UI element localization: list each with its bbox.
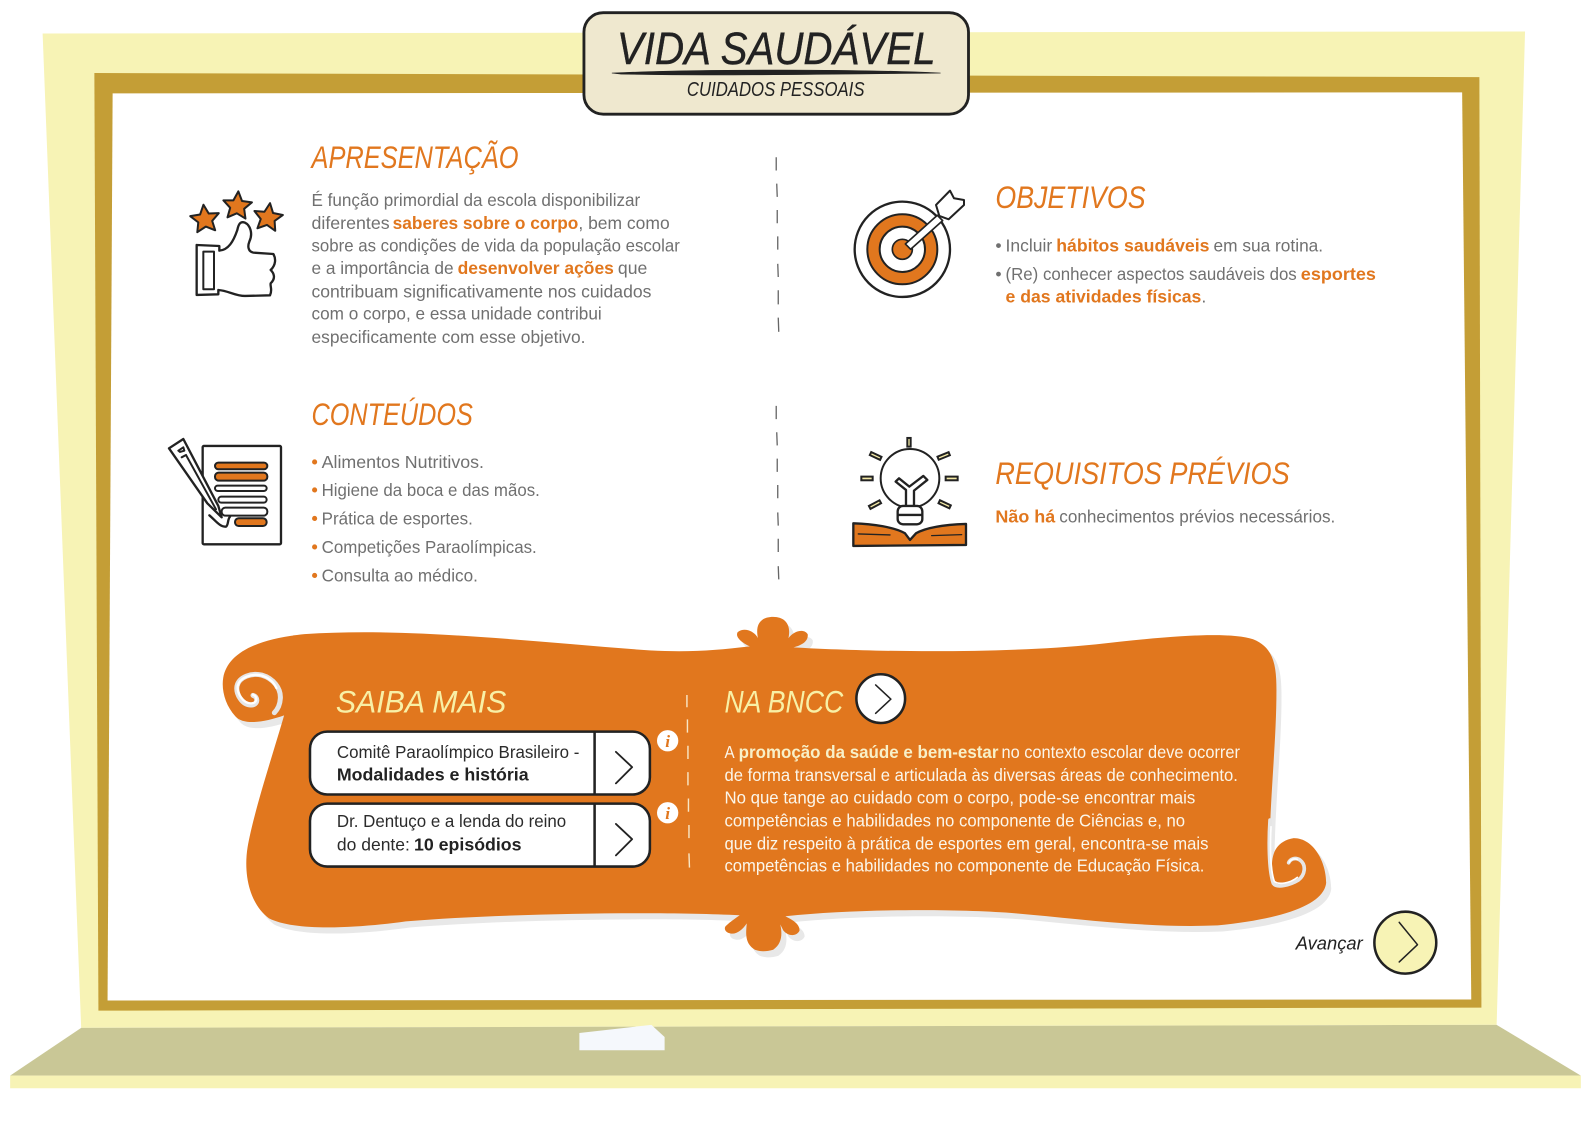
text block: objetivos: • xyxy=(995,264,1002,284)
panel: requisitos prévios xyxy=(853,438,1335,546)
text block: requisitos prévios: conhecimentos prévios necessários. xyxy=(1059,507,1335,527)
list: conteúdos xyxy=(312,452,540,585)
label: avançar: Avançar xyxy=(1295,933,1364,954)
list: conteúdos: Competições Paraolímpicas. xyxy=(322,537,537,557)
text block: bncc: no contexto escolar deve ocorrer xyxy=(1001,742,1240,762)
button: comitê paraolímpico: Comitê Paraolímpico Brasileiro - xyxy=(337,742,579,762)
list: conteúdos: Alimentos Nutritivos. xyxy=(322,452,484,472)
text block: objetivos xyxy=(995,236,1376,306)
text block: bncc: promoção da saúde e bem-estar xyxy=(739,742,998,762)
text block: apresentação: desenvolver ações xyxy=(458,258,614,278)
icon: info 1: i xyxy=(665,732,670,751)
icon: pencil and document xyxy=(169,439,281,544)
text block: objetivos: em sua rotina. xyxy=(1214,236,1323,256)
chalk ledge xyxy=(10,1025,1581,1088)
panel: orange scroll xyxy=(223,617,1331,957)
text block: bncc: de forma transversal e articulada às diversas áreas de conhecimento. xyxy=(724,765,1238,785)
list: conteúdos: • xyxy=(312,509,318,529)
text block: apresentação: , bem como xyxy=(578,213,670,233)
text block: apresentação: que xyxy=(618,258,647,278)
scroll curl: left xyxy=(237,674,280,713)
panel: apresentação xyxy=(189,140,680,347)
button: comitê paraolímpico xyxy=(310,732,650,795)
text block: bncc: que diz respeito à prática de esportes em geral, encontra-se mais xyxy=(724,833,1209,853)
heading: saiba mais: SAIBA MAIS xyxy=(336,684,506,719)
text block: objetivos: • xyxy=(995,236,1002,256)
scroll body xyxy=(223,617,1326,951)
subtitle: CUIDADOS PESSOAIS xyxy=(687,79,865,101)
list: conteúdos: Higiene da boca e das mãos. xyxy=(322,480,540,500)
text block: bncc: A xyxy=(724,742,735,762)
scroll curl: right xyxy=(1269,820,1304,886)
text block: apresentação: sobre as condições de vida da população escolar xyxy=(312,236,680,256)
heading: apresentação: APRESENTAÇÃO xyxy=(310,140,518,175)
list: conteúdos: • xyxy=(312,452,318,472)
text block: apresentação: É função primordial da escola disponibilizar xyxy=(312,190,640,210)
text block: objetivos: hábitos saudáveis xyxy=(1056,236,1210,256)
panel: conteúdos xyxy=(169,397,540,585)
list: conteúdos: • xyxy=(312,537,318,557)
button: dr. dentuço: Dr. Dentuço e a lenda do reino xyxy=(337,811,566,831)
title plate xyxy=(584,13,969,114)
icon: thumbs up with stars xyxy=(189,190,284,296)
text block: bncc: competências e habilidades no componente de Educação Física. xyxy=(724,856,1204,876)
list: conteúdos: Prática de esportes. xyxy=(322,509,473,529)
icon: bncc arrow button xyxy=(856,674,905,723)
button: dr. dentuço: do dente: xyxy=(337,834,410,854)
text block: objetivos: . xyxy=(1201,286,1206,306)
icon: info 1 xyxy=(657,730,678,751)
icon: next arrow button xyxy=(1374,912,1436,974)
text block: apresentação xyxy=(312,190,680,347)
text block: bncc: No que tange ao cuidado com o corpo, pode-se encontrar mais xyxy=(724,788,1195,808)
text block: bncc: competências e habilidades no componente de Ciências e, no xyxy=(724,810,1185,830)
eraser xyxy=(579,1025,665,1050)
list: conteúdos: • xyxy=(312,565,318,585)
title: VIDA SAUDÁVEL xyxy=(617,23,936,74)
text block: apresentação: com o corpo, e essa unidade contribui xyxy=(312,304,602,324)
heading: requisitos prévios: REQUISITOS PRÉVIOS xyxy=(995,456,1290,491)
icon: info 2: i xyxy=(665,804,670,823)
list: conteúdos: • xyxy=(312,480,318,500)
text block: apresentação: e a importância de xyxy=(312,258,454,278)
button: dr. dentuço xyxy=(310,804,650,867)
text block: apresentação: saberes sobre o corpo xyxy=(393,213,578,233)
heading: conteúdos: CONTEÚDOS xyxy=(312,397,473,432)
button: dr. dentuço: 10 episódios xyxy=(414,834,522,854)
text block: apresentação: diferentes xyxy=(312,213,390,233)
list: conteúdos: Consulta ao médico. xyxy=(322,565,478,585)
scroll shadow xyxy=(228,623,1331,957)
text block: objetivos: Incluir xyxy=(1006,236,1052,256)
heading: objetivos: OBJETIVOS xyxy=(995,180,1146,215)
text block: requisitos prévios: Não há xyxy=(995,507,1055,527)
panel: objetivos xyxy=(855,180,1376,306)
icon: info 2 xyxy=(657,802,678,823)
text block: apresentação: contribuam significativamente nos cuidados xyxy=(312,281,651,301)
icon: target with arrow xyxy=(855,191,964,297)
text block: objetivos: (Re) conhecer aspectos saudáveis dos xyxy=(1006,264,1297,284)
text block: apresentação: especificamente com esse objetivo. xyxy=(312,327,585,347)
heading: na bncc: NA BNCC xyxy=(724,684,843,719)
text block: bncc xyxy=(724,742,1240,876)
text block: objetivos: e das atividades físicas xyxy=(1006,286,1201,306)
button: comitê paraolímpico: Modalidades e história xyxy=(337,764,530,784)
icon: light bulb over book xyxy=(853,438,966,546)
text block: objetivos: esportes xyxy=(1301,264,1376,284)
